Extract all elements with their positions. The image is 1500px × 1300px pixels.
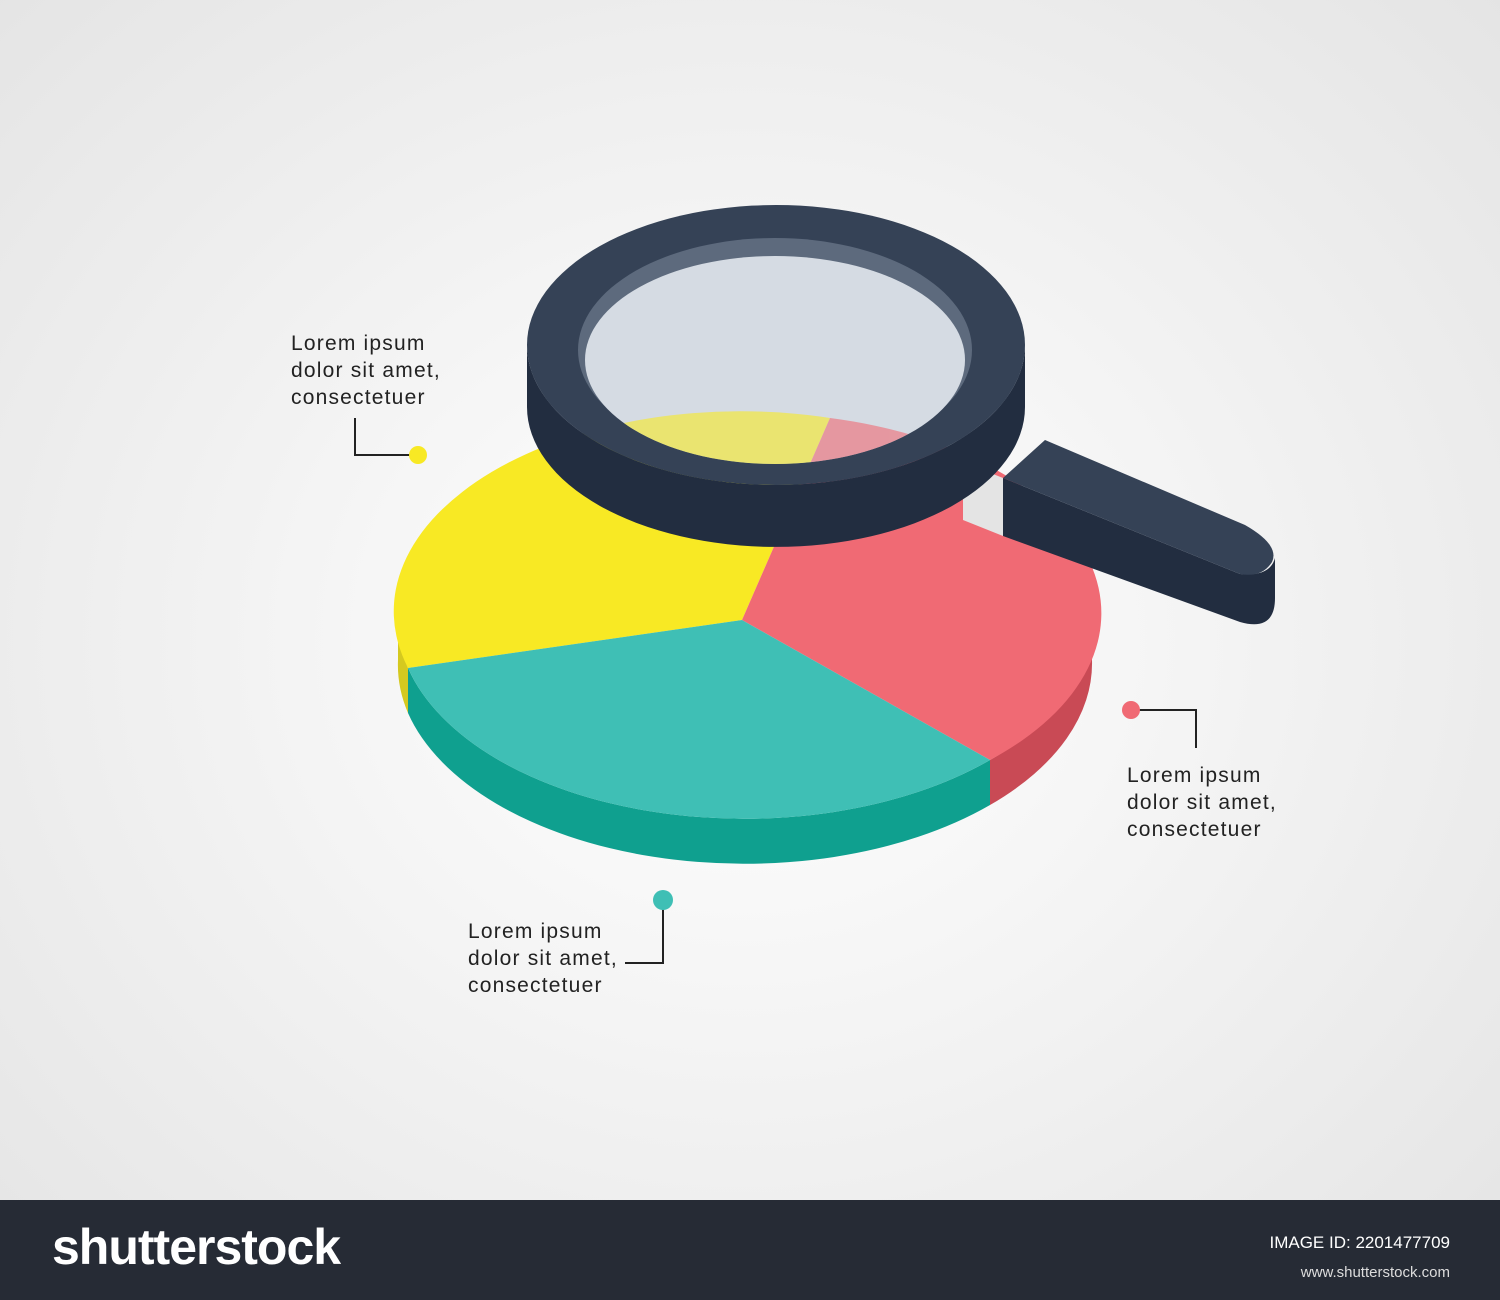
text: teal callout: consectetuer <box>468 974 603 997</box>
slice: yellow <box>394 411 830 668</box>
ring side <box>527 345 1025 547</box>
callout line: red <box>1122 701 1196 748</box>
text: red callout: dolor sit amet, <box>1127 791 1277 814</box>
footer image id <box>1269 1233 1450 1281</box>
handle <box>1003 478 1275 624</box>
inner wall <box>578 238 972 462</box>
pie chart <box>394 411 1101 864</box>
pie side: red <box>990 615 1092 805</box>
text: red callout: Lorem ipsum <box>1127 764 1262 787</box>
lens <box>585 256 965 464</box>
text: red callout <box>1127 764 1277 841</box>
pie side: teal <box>408 668 990 864</box>
magnifier <box>527 205 1275 624</box>
text: teal callout: Lorem ipsum <box>468 920 603 943</box>
text: yellow callout: Lorem ipsum <box>291 332 426 355</box>
footer logo: shutterstock <box>52 1219 340 1275</box>
callout line: teal <box>625 890 673 963</box>
footer bar <box>0 1200 1500 1300</box>
main chart <box>354 205 1275 964</box>
text: yellow callout: dolor sit amet, <box>291 359 441 382</box>
text: teal callout: dolor sit amet, <box>468 947 618 970</box>
slice: red <box>742 418 1101 760</box>
text: teal callout <box>468 920 618 997</box>
text: yellow callout: consectetuer <box>291 386 426 409</box>
callout line: yellow <box>355 418 427 464</box>
text: yellow callout <box>291 332 441 409</box>
pie side: yellow <box>398 615 408 713</box>
footer image id: IMAGE ID: 2201477709 <box>1269 1233 1450 1252</box>
text: red callout: consectetuer <box>1127 818 1262 841</box>
handle connector <box>963 462 1003 536</box>
slice: teal <box>408 620 990 819</box>
footer image id: www.shutterstock.com <box>1301 1264 1450 1281</box>
ring top <box>527 205 1025 485</box>
